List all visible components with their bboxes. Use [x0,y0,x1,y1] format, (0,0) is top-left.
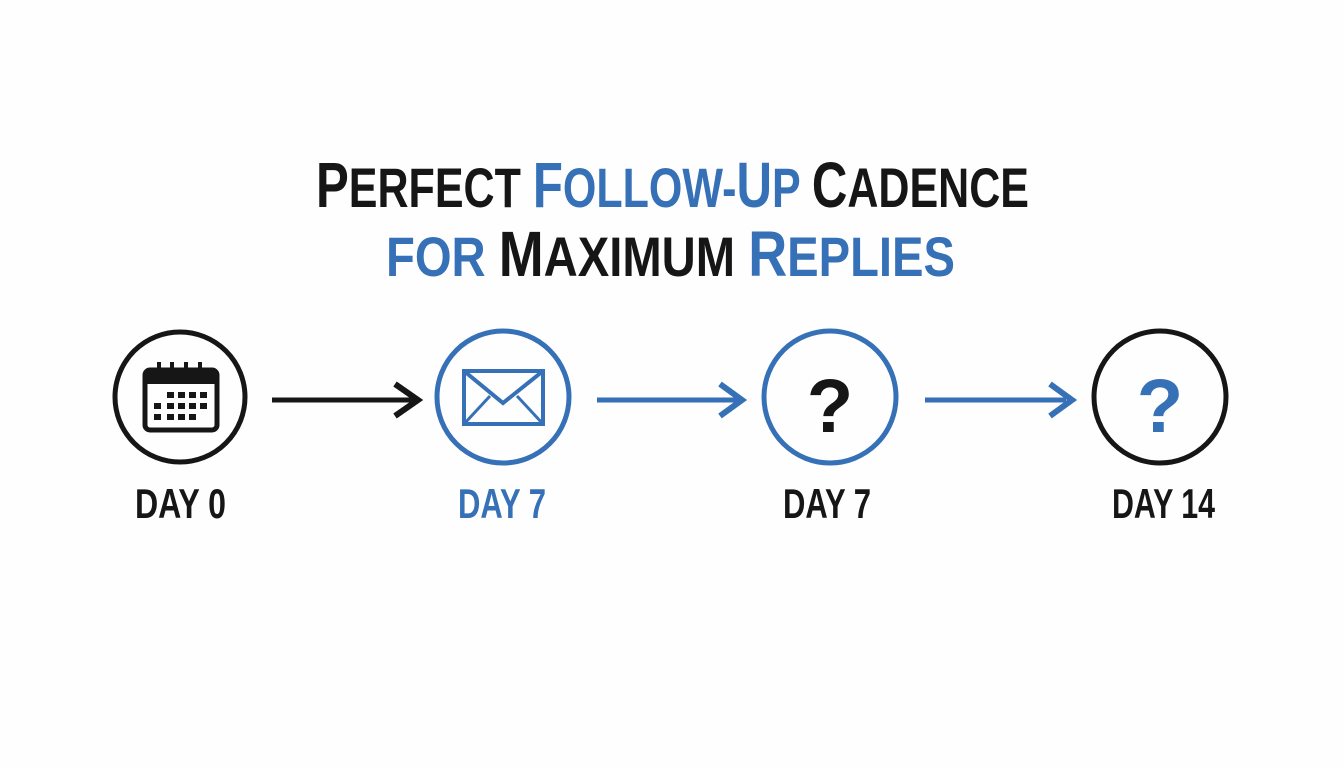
arrow 3 [925,384,1072,416]
step 3: day 7 question [764,331,896,527]
arrow 2 [597,384,742,416]
step 1: day 0 calendar [115,332,245,527]
title: PERFECT FOLLOW-UP CADENCE [316,149,1029,221]
icon: question mark blue: ? [1137,364,1183,449]
step 3: day 7 question: DAY 7 [783,480,871,527]
title: FOR MAXIMUM REPLIES [386,218,955,290]
icon: question mark: ? [807,364,853,449]
step 4: day 14 question: DAY 14 [1112,480,1215,527]
step 4: day 14 question [1094,331,1226,527]
title [316,149,1029,290]
arrow 1 [272,384,418,416]
icon: envelope [464,371,543,424]
step 1: day 0 calendar: DAY 0 [135,480,226,527]
step 2: day 7 email [437,331,569,527]
icon: calendar [145,362,217,430]
step 2: day 7 email: DAY 7 [458,480,546,527]
